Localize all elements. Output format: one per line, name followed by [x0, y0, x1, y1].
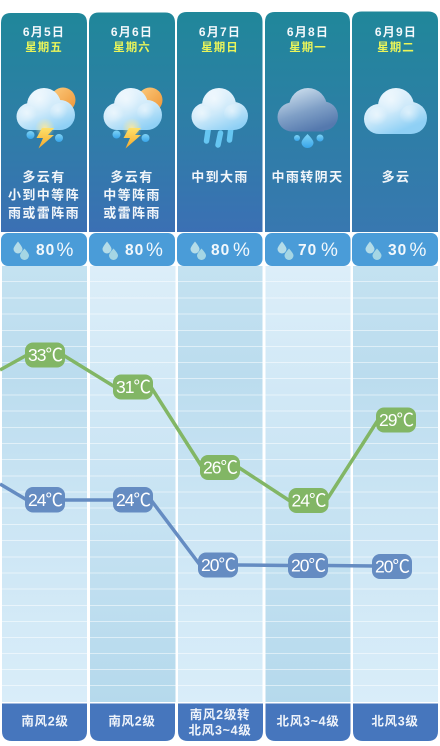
rain probability: June 8: %	[321, 240, 338, 261]
rain probability: June 9	[352, 233, 438, 266]
panel: June 6 header	[89, 12, 175, 232]
high: 29: 29℃	[379, 410, 413, 430]
low: 20: 20℃	[201, 555, 235, 575]
panel: June 5 header	[1, 13, 87, 232]
panel: June 9 header	[352, 12, 438, 232]
rain probability: June 8: 70	[298, 242, 317, 259]
rain probability: June 8	[265, 233, 350, 266]
low: 24: 24℃	[28, 490, 62, 510]
weather description: 多云	[382, 170, 410, 184]
weekday: Sunday: 星期日	[201, 40, 239, 54]
weather description: 中雨转阴天	[271, 170, 344, 184]
rain probability: June 7	[177, 233, 262, 266]
wind: June 6	[90, 704, 175, 741]
low: 20	[288, 553, 328, 578]
weather description: 中到大雨	[191, 170, 249, 184]
line chart: low temperature	[0, 484, 412, 579]
low: 20: 20℃	[375, 556, 409, 576]
icon: cloud	[364, 88, 427, 134]
date: June 8: 6月8日	[287, 25, 329, 39]
wind: June 7	[178, 704, 263, 741]
date: June 6: 6月6日	[111, 25, 153, 39]
panel: June 8 header	[265, 12, 350, 232]
wind: June 8: 北风3~4级	[277, 714, 339, 728]
rain probability: June 7: %	[233, 240, 250, 261]
high: 31: 31℃	[116, 377, 150, 397]
high: 31	[113, 374, 153, 400]
high: 33	[25, 342, 65, 368]
wind: June 8	[266, 704, 350, 741]
rain probability: June 5: %	[56, 240, 74, 261]
date: June 9: 6月9日	[375, 25, 417, 39]
weather description: 中等阵雨	[103, 188, 161, 202]
wind: June 7: 北风3~4级	[189, 722, 251, 738]
line chart: high temperature	[0, 342, 416, 513]
weekday: Friday: 星期五	[25, 40, 63, 54]
rain probability: June 7: 80	[211, 242, 230, 259]
wind: June 9: 北风3级	[371, 714, 419, 728]
icon: sun, cloud, thunder and rain	[104, 88, 162, 148]
weather description: 小到中等阵	[8, 188, 80, 202]
rain probability: June 6: %	[146, 240, 163, 261]
low: 24	[25, 487, 65, 512]
weekday: Tuesday: 星期二	[377, 40, 415, 54]
rain probability: June 5	[1, 233, 87, 266]
rain probability: June 9: 30	[388, 242, 407, 259]
rain probability: June 6	[89, 233, 175, 266]
low: 24	[113, 487, 153, 512]
weather description: 多云有	[110, 170, 154, 184]
wind: June 5: 南风2级	[21, 714, 69, 728]
rain probability row	[1, 233, 438, 266]
wind: June 9	[353, 704, 438, 741]
weather description	[8, 170, 80, 220]
rain probability: June 5: 80	[36, 242, 55, 259]
rain probability: June 6: 80	[125, 242, 144, 259]
high: 24: 24℃	[292, 490, 326, 510]
weekday: Saturday: 星期六	[113, 40, 151, 54]
weather description: 或雷阵雨	[103, 206, 161, 220]
wind: June 7: 南风2级转	[190, 707, 250, 722]
date: June 5: 6月5日	[23, 25, 65, 39]
weather description: 多云有	[22, 170, 66, 184]
date: June 7: 6月7日	[199, 25, 241, 39]
high: 26: 26℃	[203, 458, 237, 478]
low: 20: 20℃	[291, 556, 325, 576]
icon: dark rain cloud	[278, 88, 338, 148]
wind: June 6: 南风2级	[108, 714, 156, 728]
icon: sun, cloud, thunder and rain	[16, 88, 76, 148]
low: 20	[372, 554, 412, 579]
panel: June 7 header	[177, 12, 262, 232]
low: 24: 24℃	[116, 490, 150, 510]
weekday: Monday: 星期一	[289, 40, 327, 54]
rain probability: June 9: %	[410, 240, 426, 261]
high: 24	[288, 488, 328, 513]
weather description: 雨或雷阵雨	[8, 206, 80, 220]
high: 33: 33℃	[28, 345, 62, 365]
icon: rain cloud	[192, 88, 248, 145]
wind row	[2, 704, 438, 741]
high: 29	[376, 408, 416, 432]
weather description	[103, 170, 161, 220]
wind: June 5	[2, 704, 87, 741]
high: 26	[200, 455, 240, 480]
low: 20	[198, 552, 238, 578]
chart background columns	[2, 266, 438, 702]
